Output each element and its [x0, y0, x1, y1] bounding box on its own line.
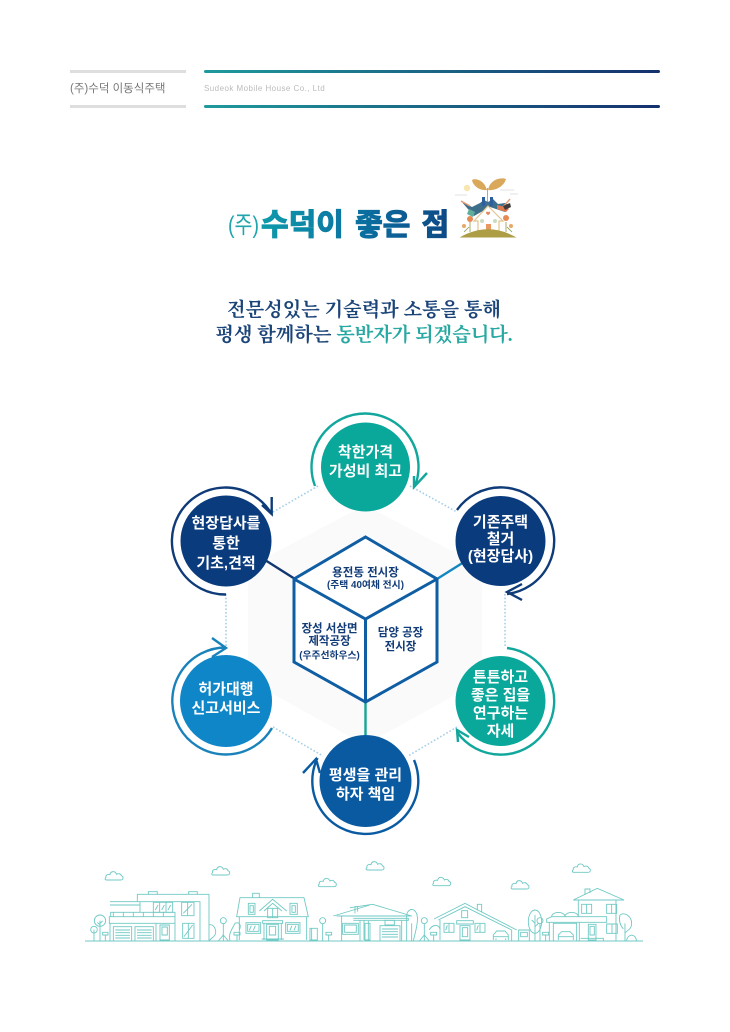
node: permit service: 허가대행: [198, 681, 254, 698]
left houses and clouds: [91, 867, 370, 941]
node: permit service: 신고서비스: [191, 700, 261, 717]
connector lines: [265, 560, 464, 736]
header right label: [204, 70, 660, 108]
header right label: Sudeok Mobile House Co., Ltd: [204, 84, 325, 93]
node: permit service: [172, 638, 272, 754]
subtitle: [215, 298, 513, 346]
subtitle: 평생 함께하는 동반자가 되겠습니다.: [215, 323, 513, 346]
node: sturdy house: [456, 648, 554, 755]
node: sturdy house: 튼튼하고: [473, 669, 528, 686]
node: site survey: 기초,견적: [196, 555, 256, 572]
skyline illustration: [85, 862, 643, 941]
icon: house with sprout and people: [455, 178, 518, 238]
cube label: left: [299, 622, 360, 662]
right houses and clouds: [350, 862, 643, 941]
subtitle: 전문성있는 기술력과 소통을 통해: [227, 298, 501, 321]
node: demolition: 기존주택: [473, 514, 528, 531]
node: demolition: 철거: [487, 531, 514, 548]
diagram: hexagon cycle: [172, 414, 554, 834]
dotted hexagon connectors: [226, 486, 505, 756]
title: 수덕이 좋은 점: [261, 209, 449, 242]
center cube: [294, 537, 437, 702]
node: sturdy house: 연구하는: [473, 705, 528, 722]
node: lifetime care: 평생을 관리: [329, 767, 402, 784]
cube label: left: (우주선하우스): [299, 648, 360, 662]
node: demolition: (현장답사): [468, 548, 533, 565]
node: sturdy house: 자세: [487, 723, 514, 740]
cube label: left: 제작공장: [308, 634, 351, 648]
node: lifetime care: [303, 735, 418, 834]
node: site survey: 현장답사를: [191, 515, 261, 532]
node: fair price: 착한가격: [338, 444, 393, 461]
node: site survey: 통한: [212, 535, 240, 552]
cube label: top: [327, 566, 404, 591]
node: fair price: 가성비 최고: [329, 463, 402, 480]
header: [70, 70, 660, 108]
pale hexagon background: [248, 505, 482, 745]
cube label: top: (주택 40여채 전시): [327, 578, 404, 591]
cube label: right: 전시장: [385, 640, 417, 653]
cube label: top: 용전동 전시장: [332, 566, 399, 579]
title: (주): [228, 212, 259, 239]
node: demolition: [456, 487, 554, 600]
cube label: right: [378, 626, 424, 653]
ground line: [85, 940, 643, 942]
node: lifetime care: 하자 책임: [336, 786, 395, 803]
cube label: left: 장성 서삼면: [301, 622, 358, 635]
node: sturdy house: 좋은 집을: [471, 687, 530, 704]
header left label: (주)수덕 이동식주택: [70, 82, 166, 95]
node: site survey: [172, 488, 272, 595]
header left label: [70, 70, 186, 108]
node: fair price: [312, 414, 427, 512]
cube label: right: 담양 공장: [378, 626, 424, 639]
